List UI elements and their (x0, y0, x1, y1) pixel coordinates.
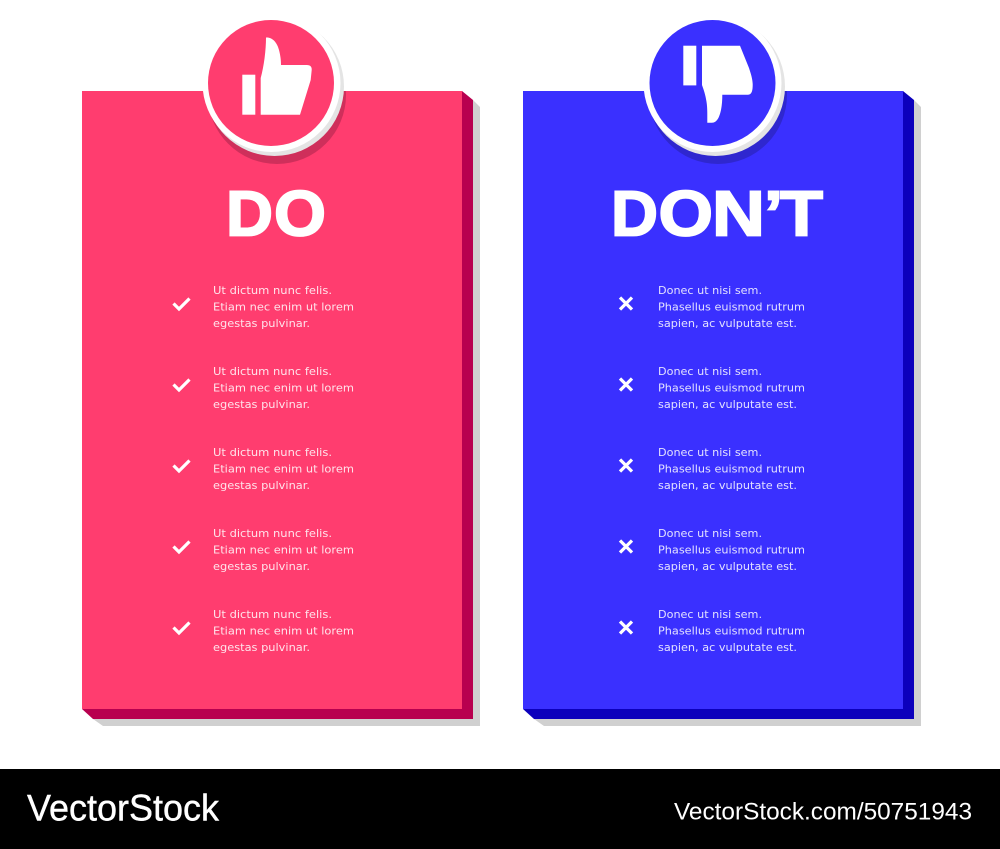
heading: don't: ’ (764, 178, 783, 250)
heading: do (226, 178, 326, 250)
do item 4: Ut dictum nunc felis. (213, 528, 332, 540)
don't item 5: Phasellus euismod rutrum (658, 626, 805, 638)
don't item 1 (620, 285, 805, 330)
panel: do (82, 14, 480, 726)
don't item 4 (620, 528, 805, 573)
don't item 5 (620, 609, 805, 654)
do item 3: Ut dictum nunc felis. (213, 447, 332, 459)
footer logo: VectorStock (27, 788, 219, 828)
do item 1: Etiam nec enim ut lorem (213, 302, 354, 314)
badge: thumbs up (202, 14, 346, 164)
badge: thumbs down (644, 14, 787, 164)
don't item 2: Donec ut nisi sem. (658, 366, 762, 378)
don't item 2: sapien, ac vulputate est. (658, 399, 797, 411)
don't item 5: Donec ut nisi sem. (658, 609, 762, 621)
do item 3 (174, 447, 354, 492)
do item 2 (174, 366, 354, 411)
do item 2: Ut dictum nunc felis. (213, 366, 332, 378)
do item 5: egestas pulvinar. (213, 642, 310, 654)
heading: don't: T (780, 178, 823, 250)
do item 5 (174, 609, 354, 654)
icon: thumbs down (683, 46, 753, 123)
do item 1: egestas pulvinar. (213, 318, 310, 330)
do item 2: Etiam nec enim ut lorem (213, 382, 354, 394)
do item 3: Etiam nec enim ut lorem (213, 464, 354, 476)
heading: do: D (226, 178, 273, 250)
don't item 1: Phasellus euismod rutrum (658, 302, 805, 314)
don't item 4: Donec ut nisi sem. (658, 528, 762, 540)
don't item 4: Phasellus euismod rutrum (658, 544, 805, 556)
footer bar (0, 769, 1000, 849)
list: do items (174, 285, 354, 654)
do item 5: Etiam nec enim ut lorem (213, 626, 354, 638)
heading: do: O (274, 178, 326, 250)
do item 2: egestas pulvinar. (213, 399, 310, 411)
heading: don't (611, 178, 823, 250)
panel: don't (523, 14, 921, 726)
don't item 4: sapien, ac vulputate est. (658, 561, 797, 573)
do item 1: Ut dictum nunc felis. (213, 285, 332, 297)
don't item 2: Phasellus euismod rutrum (658, 382, 805, 394)
do item 4 (174, 528, 354, 573)
don't item 1: Donec ut nisi sem. (658, 285, 762, 297)
don't item 5: sapien, ac vulputate est. (658, 642, 797, 654)
do item 3: egestas pulvinar. (213, 480, 310, 492)
do item 4: egestas pulvinar. (213, 561, 310, 573)
list: don't items (620, 285, 805, 654)
do item 1 (174, 285, 354, 330)
don't item 3: sapien, ac vulputate est. (658, 480, 797, 492)
footer image id: VectorStock.com/50751943 (674, 800, 972, 826)
heading: don't: D (611, 178, 658, 250)
icon: thumbs up (242, 37, 312, 115)
don't item 3: Donec ut nisi sem. (658, 447, 762, 459)
heading: don't: O (658, 178, 713, 250)
do item 5: Ut dictum nunc felis. (213, 609, 332, 621)
don't item 3: Phasellus euismod rutrum (658, 464, 805, 476)
don't item 1: sapien, ac vulputate est. (658, 318, 797, 330)
heading: don't: N (712, 178, 765, 250)
don't item 2 (620, 366, 805, 411)
don't item 3 (620, 447, 805, 492)
do item 4: Etiam nec enim ut lorem (213, 544, 354, 556)
